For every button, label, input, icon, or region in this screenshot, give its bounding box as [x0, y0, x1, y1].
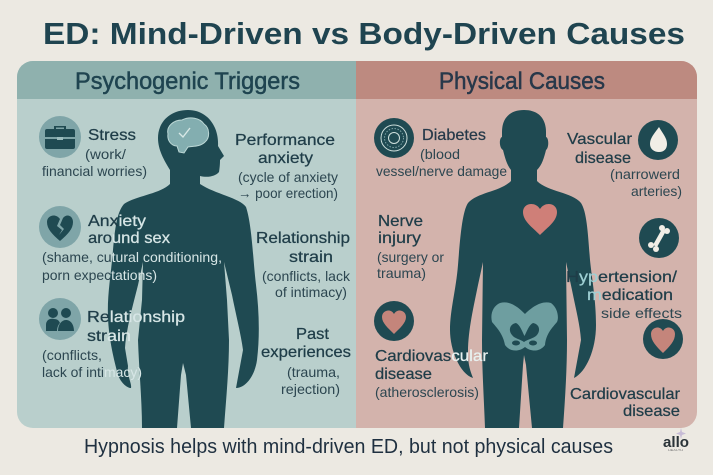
item: diabetes: (blood	[420, 146, 460, 162]
icon: broken heart	[39, 206, 81, 248]
item: cardiovascular disease left	[374, 301, 489, 400]
item: relationship strain right: (conflicts, lack	[262, 268, 351, 284]
icon: concentric circles	[374, 118, 414, 158]
heading: physical causes: Physical Causes	[439, 68, 605, 95]
item: vascular disease: disease	[575, 150, 631, 167]
item: vascular disease	[567, 120, 682, 199]
item: stress: financial worries)	[42, 163, 147, 179]
silhouette: body figure with heart and pelvis	[450, 110, 596, 428]
item: stress: (work/	[85, 146, 126, 162]
item: past experiences: rejection)	[281, 381, 340, 397]
item: past experiences: (trauma,	[287, 364, 340, 380]
item: cardiovascular disease right: Cardiovascular	[570, 386, 681, 403]
item: relationship strain left: (conflicts,	[42, 347, 102, 363]
item: performance anxiety: → poor erection)	[238, 185, 338, 201]
item: cardiovascular disease left: (atherosclerosis)	[375, 384, 479, 400]
item: anxiety around sex: around sex	[88, 230, 170, 247]
item: diabetes: Diabetes	[422, 127, 486, 144]
item: diabetes	[374, 118, 507, 179]
item: diabetes: vessel/nerve damage	[376, 163, 507, 179]
item: nerve injury: (surgery or	[377, 249, 444, 265]
item: nerve injury	[377, 213, 444, 281]
item: vascular disease: (narrowerd	[610, 166, 680, 182]
item: performance anxiety	[235, 132, 338, 201]
item: relationship strain right: strain	[289, 249, 333, 266]
icon: heart	[643, 319, 683, 359]
icon: water drop	[638, 120, 678, 160]
item: relationship strain left: Relationship	[87, 309, 185, 326]
icon: brain with check	[168, 118, 209, 153]
item: relationship strain left: lack of intimacy)	[42, 364, 142, 380]
item: hypertension medication	[566, 218, 682, 321]
item: stress: Stress	[88, 127, 136, 144]
icon: heart	[374, 301, 414, 341]
item: cardiovascular disease left: Cardiovas cular	[375, 348, 489, 365]
heading: psychogenic triggers: Psychogenic Triggers	[75, 68, 300, 95]
icon: briefcase	[39, 116, 81, 158]
item: nerve injury: injury	[378, 230, 421, 247]
item: hypertension medication: Hypertension/	[566, 269, 678, 286]
item: performance anxiety: (cycle of anxiety	[238, 169, 338, 185]
footer caption: Hypnosis helps with mind-driven ED, but not physical causes	[84, 436, 613, 458]
panel: physical causes	[356, 61, 697, 428]
icon: bone	[639, 218, 679, 258]
item: relationship strain right: of intimacy)	[275, 284, 347, 300]
item: relationship strain right	[256, 230, 351, 300]
item: past experiences: Past	[296, 326, 330, 343]
icon: pelvis	[491, 302, 558, 351]
panel: psychogenic triggers	[17, 61, 356, 428]
item: hypertension medication: medication	[587, 287, 673, 304]
item: relationship strain left	[39, 298, 185, 380]
item: stress	[39, 116, 147, 179]
item: past experiences	[261, 326, 351, 397]
item: cardiovascular disease right: disease	[623, 403, 680, 420]
item: anxiety around sex: porn expectations)	[42, 267, 157, 283]
item: relationship strain left: strain	[87, 328, 131, 345]
item: cardiovascular disease left: disease	[375, 366, 432, 383]
icon: glowing heart	[523, 204, 557, 235]
logo: allo health: HEALTH	[668, 448, 683, 452]
item: anxiety around sex: (shame, cutural conditioning,	[42, 249, 222, 265]
item: anxiety around sex: Anxiety	[88, 213, 146, 230]
silhouette: mind figure with brain	[108, 110, 259, 428]
item: vascular disease: Vascular	[567, 131, 633, 148]
item: vascular disease: arteries)	[631, 183, 682, 199]
title: ED: Mind-Driven vs Body-Driven Causes	[43, 16, 685, 51]
item: relationship strain right: Relationship	[256, 230, 350, 247]
item: nerve injury: Nerve	[378, 213, 423, 230]
item: performance anxiety: anxiety	[258, 150, 313, 167]
item: past experiences: experiences	[261, 344, 351, 361]
logo: allo health: allo	[663, 434, 689, 451]
icon: two people	[39, 298, 81, 340]
item: hypertension medication: side effects	[601, 305, 682, 321]
item: nerve injury: trauma)	[377, 265, 426, 281]
item: cardiovascular disease right	[570, 319, 683, 420]
item: performance anxiety: Performance	[235, 132, 335, 149]
item: anxiety around sex	[39, 206, 222, 283]
